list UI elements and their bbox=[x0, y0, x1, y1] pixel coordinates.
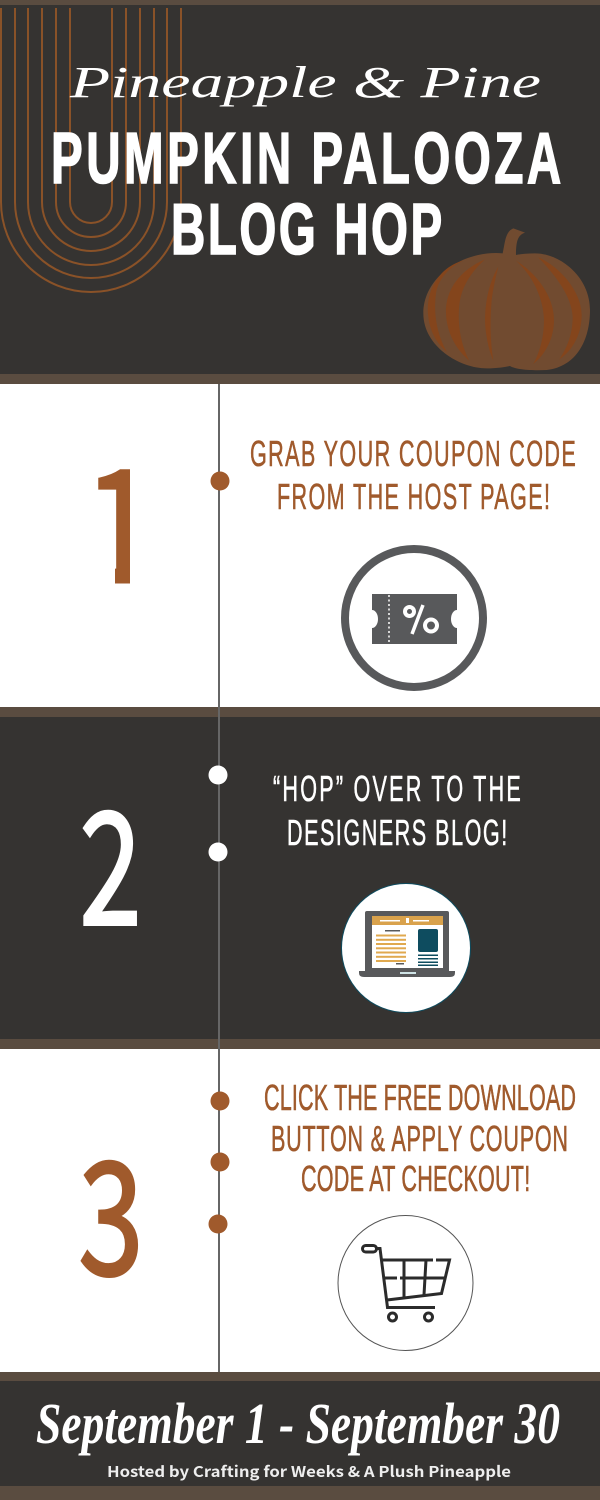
concentric arches decoration bbox=[1, 8, 181, 292]
step 2 text: “HOP” OVER TO THE bbox=[273, 769, 521, 809]
step 2 text bbox=[273, 769, 521, 853]
panel: header bbox=[0, 0, 600, 384]
title: BLOG HOP bbox=[171, 189, 442, 269]
panel: footer bbox=[0, 1372, 600, 1500]
icon: laptop bbox=[342, 884, 470, 1012]
step 1 text: GRAB YOUR COUPON CODE bbox=[250, 434, 576, 474]
step 1 text: FROM THE HOST PAGE! bbox=[277, 477, 550, 517]
panel: step 3 bbox=[0, 1039, 600, 1372]
step 3 text bbox=[264, 1078, 576, 1199]
step 1 text bbox=[250, 434, 576, 517]
timeline line bbox=[218, 384, 220, 1378]
step number 3: 3 bbox=[78, 1094, 144, 1320]
hosted by line: Hosted by Crafting for Weeks & A Plush Pineapple bbox=[107, 1461, 511, 1482]
icon: coupon bbox=[345, 549, 483, 687]
step number 2: 2 bbox=[80, 744, 142, 970]
step 3 text: BUTTON & APPLY COUPON bbox=[271, 1119, 568, 1159]
step 2 text: DESIGNERS BLOG! bbox=[287, 813, 507, 853]
panel: step 1 bbox=[0, 384, 600, 707]
step 3 text: CODE AT CHECKOUT! bbox=[301, 1159, 530, 1199]
title: PUMPKIN PALOOZA bbox=[51, 118, 561, 198]
script brand name: Pineapple & Pine bbox=[69, 58, 541, 107]
title bbox=[51, 118, 561, 269]
icon: shopping cart bbox=[338, 1216, 473, 1350]
step 3 text: CLICK THE FREE DOWNLOAD bbox=[264, 1078, 576, 1118]
timeline dots bbox=[208, 472, 230, 1234]
icon: pumpkin bbox=[423, 228, 590, 370]
panel: step 2 bbox=[0, 707, 600, 1039]
step number 1: 1 bbox=[83, 401, 159, 627]
